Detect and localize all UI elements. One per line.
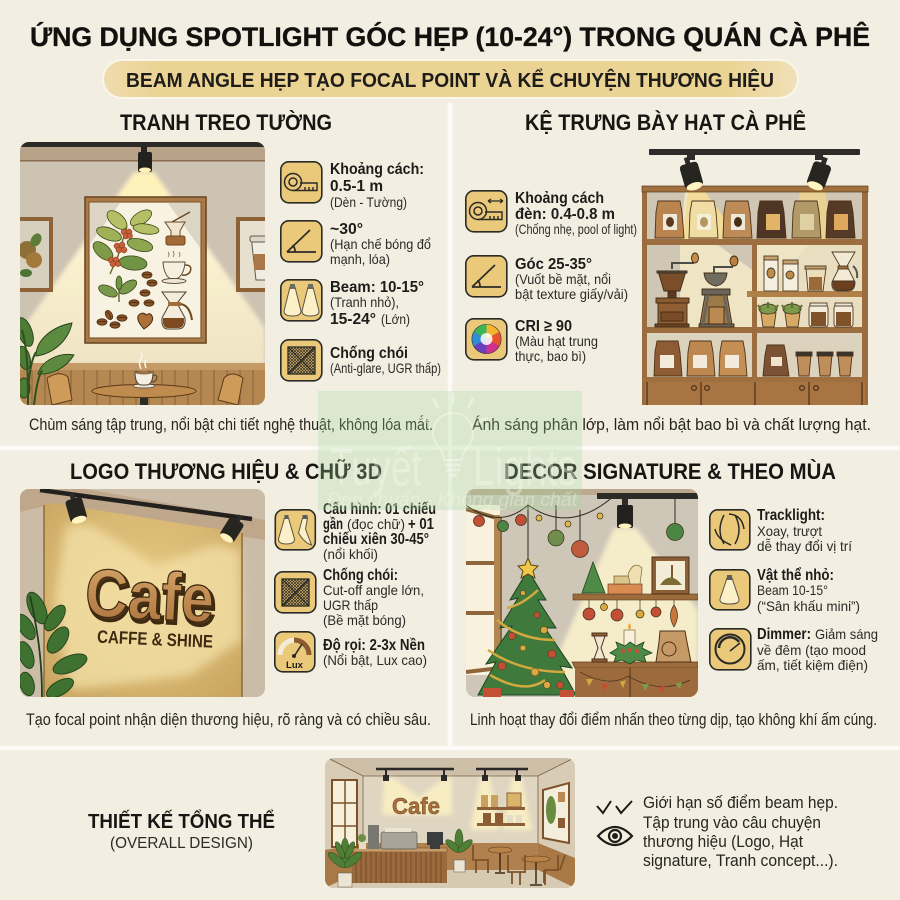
panel: kệ trưng bày hạt cà phê <box>466 110 871 434</box>
text: cấu hình <box>323 501 436 562</box>
caption: kệ trưng bày: Ánh sáng phân lớp, làm nổi bật bao bì và chất lượng hạt. <box>472 415 871 434</box>
icon: anti-glare mesh <box>281 340 322 381</box>
text: cấu hình: chiếu xiên 30-45° <box>323 531 429 548</box>
text: góc 25-35 <box>515 256 628 302</box>
text: design advice: thương hiệu (Logo, Hạt <box>643 832 803 851</box>
heading: kệ trưng bày: KỆ TRƯNG BÀY HẠT CÀ PHÊ <box>525 110 806 135</box>
heading: decor signature: DECOR SIGNATURE & THEO MÙA <box>504 459 836 484</box>
watermark: Tuyết Lights: Lights <box>473 439 577 497</box>
text: khoảng cách: 0.5-1 m <box>330 178 383 195</box>
heading: overall design <box>88 809 275 852</box>
icon: tape measure <box>281 162 322 203</box>
text: dimmer: ấm, tiết kiệm điện) <box>757 657 868 673</box>
text: beam: 15-24° <box>330 311 376 328</box>
text: tracklight: Xoay, trượt <box>757 523 822 539</box>
watermark: Tuyết Lights: Tuyết <box>330 439 422 497</box>
grinders <box>655 253 738 327</box>
text: design advice: Giới hạn số điểm beam hẹp. <box>643 793 838 812</box>
text: góc chiếu: ~30° <box>330 221 363 238</box>
watermark: Tuyết Lights <box>318 391 582 511</box>
icon: anti-glare mesh <box>275 572 316 613</box>
text: design advice: Tập trung vào câu chuyện <box>643 813 821 832</box>
panel dividers <box>0 103 900 748</box>
text: chống chói cut-off: UGR thấp <box>323 597 378 613</box>
text: chống chói cut-off <box>323 567 424 628</box>
bottom scene logo: Cafe <box>392 793 440 819</box>
text: khoảng cách đèn: Khoảng cách <box>515 190 604 207</box>
logo wordmark <box>87 568 216 628</box>
illustration: display shelf <box>642 186 868 405</box>
title: ỨNG DỤNG SPOTLIGHT GÓC HẸP (10-24°) TRONG QUÁN CÀ PHÊ <box>30 21 870 52</box>
icon: track spotlight <box>138 146 152 172</box>
icon: eye <box>598 827 632 845</box>
text: khoảng cách đèn <box>515 190 637 237</box>
text: design advice <box>643 793 838 870</box>
icon: two beams <box>281 280 322 321</box>
subtitle pill: BEAM ANGLE HẸP TẠO FOCAL POINT VÀ KỂ CHUYỆN THƯƠNG HIỆU <box>126 68 774 92</box>
text: vật thể nhỏ: Beam 10-15° <box>757 582 828 598</box>
icon: near and angled beams <box>275 510 315 550</box>
icon: angle <box>466 256 507 297</box>
text: tracklight: Tracklight: <box>757 507 825 524</box>
text: chống chói cut-off: (Bề mặt bóng) <box>323 612 406 628</box>
text: độ rọi: Độ rọi: 2-3x Nền <box>323 637 425 654</box>
heading: logo thương hiệu: LOGO THƯƠNG HIỆU & CHỮ 3D <box>70 459 382 484</box>
panel: logo thương hiệu <box>13 459 436 729</box>
text: CRI: thực, bao bì) <box>515 348 586 364</box>
icon: check marks <box>597 801 632 813</box>
panel: thiết kế tổng thể <box>88 758 838 888</box>
text: chống chói: (Anti-glare, UGR thấp) <box>330 360 441 376</box>
text: khoảng cách: (Dèn - Tường) <box>330 194 407 210</box>
text: cấu hình: Cấu hình: 01 chiếu <box>323 501 436 518</box>
text: dimmer: Dimmer: <box>757 626 811 643</box>
icon: dimmer <box>710 629 751 670</box>
text: góc chiếu <box>330 221 431 267</box>
row one bags <box>655 201 855 238</box>
text: cấu hình: (đọc chữ) <box>347 516 405 532</box>
text: vật thể nhỏ <box>757 566 860 614</box>
text: vật thể nhỏ: Vật thể nhỏ: <box>757 566 834 584</box>
caption: logo: Tạo focal point nhận diện thương hiệu, rõ ràng và có chiều sâu. <box>26 710 431 729</box>
text: beam: Beam: 10-15° <box>330 279 424 296</box>
text: design advice: signature, Tranh concept...). <box>643 851 838 870</box>
text: beam: (Lớn) <box>381 311 410 327</box>
text: góc 25-35: (Vuốt bề mặt, nổi <box>515 271 611 287</box>
heading: tranh treo tường: TRANH TREO TƯỜNG <box>120 110 332 135</box>
text: dimmer <box>757 626 878 673</box>
panel: decor signature <box>466 459 878 729</box>
icon: angle <box>281 221 322 262</box>
illustration: full cafe interior <box>325 758 575 888</box>
icon: rotate and slide <box>710 510 750 550</box>
text: dimmer: Giảm sáng <box>815 626 878 642</box>
text: khoảng cách <box>330 161 424 210</box>
text: độ rọi <box>323 637 427 668</box>
text: góc chiếu: (Hạn chế bóng đổ <box>330 236 431 252</box>
illustration: 3D cafe logo wall <box>13 489 265 702</box>
jars and plants <box>758 252 857 327</box>
text: dimmer: về đêm (tạo mood <box>757 642 866 658</box>
logo wordmark: Cafe <box>85 558 218 640</box>
icon: tape measure with arrows <box>466 191 507 232</box>
icon: single narrow beam <box>710 570 750 610</box>
logo tagline: CAFFE & SHINE <box>97 627 213 652</box>
heading: overall design: THIẾT KẾ TỔNG THỂ <box>88 809 275 833</box>
text: khoảng cách đèn: đèn: 0.4-0.8 m <box>515 206 615 223</box>
text: beam: (Tranh nhỏ), <box>330 294 399 310</box>
text: CRI <box>515 318 598 364</box>
text: góc 25-35: bật texture giấy/vải) <box>515 286 628 302</box>
text: chống chói <box>330 345 441 376</box>
text: độ rọi: (Nổi bật, Lux cao) <box>323 652 427 668</box>
text: vật thể nhỏ: (“Sân khấu mini”) <box>757 598 860 614</box>
text: cấu hình: + 01 <box>408 516 434 533</box>
icon: lux gauge <box>275 632 315 672</box>
caption: tranh treo tường: Chùm sáng tập trung, nổi bật chi tiết nghệ thuật, không lóa mắt. <box>29 415 433 434</box>
text: góc 25-35: Góc 25-35° <box>515 256 592 273</box>
text: CRI: (Màu hạt trung <box>515 333 598 349</box>
text: CRI: CRI ≥ 90 <box>515 318 572 335</box>
text: khoảng cách: Khoảng cách: <box>330 161 424 178</box>
panel: tranh treo tường <box>13 110 441 434</box>
watermark: Tuyết Lights: Đèn chuẩn - Không gian chất <box>327 490 578 511</box>
text: cấu hình: (nổi khối) <box>323 546 378 562</box>
icon: lux gauge: Lux <box>286 660 304 671</box>
text: chống chói cut-off: Chống chói: <box>323 567 398 584</box>
icon: colour wheel <box>466 319 507 360</box>
bottom row goods <box>654 341 853 376</box>
text: khoảng cách đèn: (Chống nhẹ, pool of light) <box>515 221 637 237</box>
text: chống chói cut-off: Cut-off angle lớn, <box>323 582 424 598</box>
text: góc chiếu: mạnh, lóa) <box>330 251 390 267</box>
subtitle pill <box>102 59 799 99</box>
logo wordmark: Cafe <box>83 555 216 637</box>
text: tracklight: dễ thay đổi vị trí <box>757 538 852 554</box>
text: beam <box>330 279 424 328</box>
text: cấu hình: gần <box>323 516 343 533</box>
illustration: framed coffee art lit by spotlight <box>13 142 266 405</box>
text: tracklight <box>757 507 852 554</box>
illustration: seasonal christmas decor <box>466 489 698 698</box>
text: chống chói: Chống chói <box>330 345 408 362</box>
icon: track rail with two spotlights <box>649 149 860 193</box>
heading: overall design: (OVERALL DESIGN) <box>110 835 253 852</box>
